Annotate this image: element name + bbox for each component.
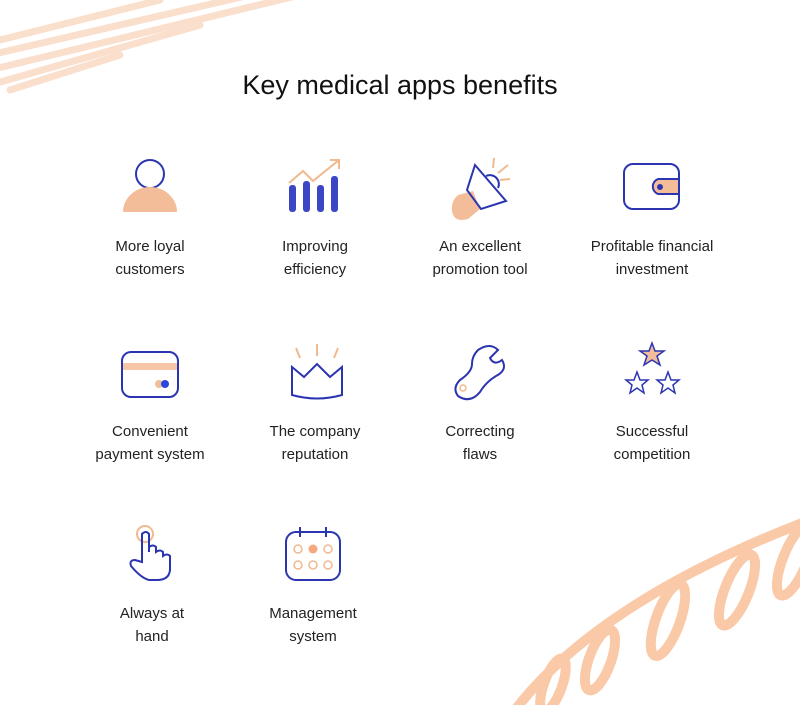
label xyxy=(614,423,690,463)
label xyxy=(432,238,528,278)
label: Profitable financial xyxy=(591,238,713,255)
label: flaws xyxy=(463,446,497,463)
icon: stars xyxy=(624,341,681,395)
label: investment xyxy=(616,261,688,278)
label: hand xyxy=(135,628,169,645)
label: More loyal xyxy=(115,238,185,255)
icon: crown xyxy=(291,344,343,400)
label: The company xyxy=(270,423,360,440)
icon: calendar xyxy=(285,527,341,581)
label: Always at xyxy=(120,605,184,622)
label xyxy=(120,605,184,645)
label: Correcting xyxy=(445,423,515,440)
label xyxy=(445,423,515,463)
label: Management xyxy=(269,605,357,622)
label: Convenient xyxy=(112,423,188,440)
icon: chart xyxy=(288,159,340,212)
icon: wallet xyxy=(623,163,680,210)
label xyxy=(95,423,205,463)
label xyxy=(282,238,348,278)
label xyxy=(115,238,185,278)
label: Successful xyxy=(616,423,688,440)
icon: card xyxy=(121,351,179,398)
label: Improving xyxy=(282,238,348,255)
label xyxy=(269,605,357,645)
label: efficiency xyxy=(284,261,346,278)
label: An excellent xyxy=(439,238,521,255)
label: system xyxy=(289,628,337,645)
label: reputation xyxy=(282,446,348,463)
icon: megaphone xyxy=(452,158,510,220)
icon: hand xyxy=(130,525,171,581)
title: Key medical apps benefits xyxy=(242,70,558,100)
label: competition xyxy=(614,446,690,463)
label xyxy=(591,238,713,278)
label: customers xyxy=(115,261,185,278)
label: promotion tool xyxy=(432,261,528,278)
icon: person xyxy=(123,159,177,212)
decoration: bottom-right loops xyxy=(512,518,800,705)
icon: wrench xyxy=(454,345,505,400)
decoration: top-left brush strokes xyxy=(0,0,294,94)
label xyxy=(270,423,360,463)
label: payment system xyxy=(95,446,205,463)
